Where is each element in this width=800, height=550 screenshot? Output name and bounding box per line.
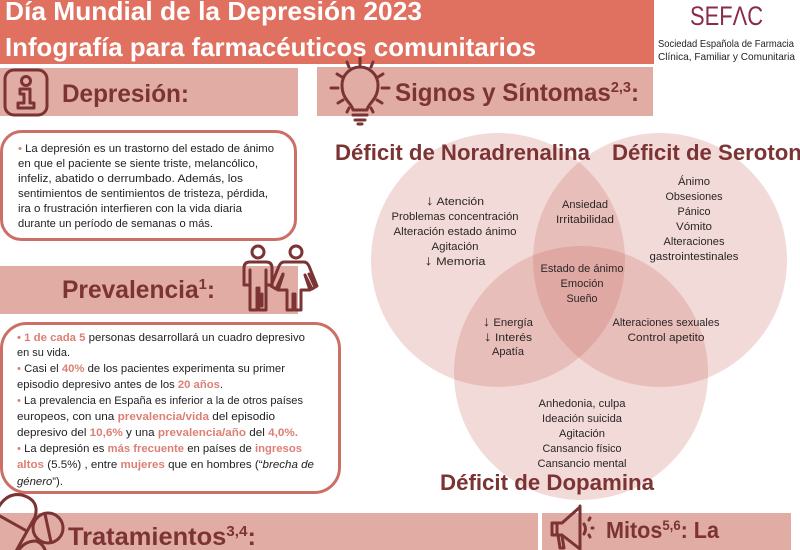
- heading: Prevalencia: Prevalencia: [62, 276, 201, 304]
- list: serotonin and dopamine overlap: Control apetito: [628, 332, 704, 344]
- heading: Prevalencia: 1: [199, 276, 207, 293]
- list: serotonin symptoms: Pánico: [678, 206, 710, 218]
- heading: Depresión: Depresión:: [62, 80, 189, 108]
- panel: prevalence facts: [2, 324, 340, 492]
- panel: depression definition: ira o frustración interfieren con la vida diaria: [18, 203, 243, 215]
- list: noradrenaline symptoms: Problemas concentración: [392, 211, 518, 223]
- list: center overlap: Sueño: [566, 293, 598, 305]
- heading: Mitos: : La: [681, 517, 719, 543]
- list: serotonin symptoms: Vómito: [676, 221, 712, 233]
- panel: prevalence facts: género”).: [17, 476, 63, 488]
- logo: SEFAC: Clínica, Familiar y Comunitaria: [658, 51, 795, 63]
- panel: prevalence facts: • 1 de cada 5 personas desarrollará un cuadro depresivo: [17, 332, 305, 344]
- list: noradrenaline symptoms: Agitación: [432, 241, 478, 253]
- list: noradrenaline symptoms: ↓ Atención: [426, 192, 484, 208]
- list: noradrenaline symptoms: ↓ Memoria: [424, 252, 487, 268]
- list: dopamine symptoms: [538, 398, 626, 470]
- list: dopamine symptoms: Cansancio físico: [542, 443, 622, 455]
- icon: information: [5, 70, 47, 115]
- icon: man and woman: [244, 246, 317, 310]
- panel: prevalence facts: • La depresión es más frecuente en países de ingresos: [17, 443, 302, 455]
- list: noradrenaline and serotonin overlap: Irritabilidad: [556, 214, 614, 226]
- list: serotonin symptoms: [650, 175, 739, 263]
- heading: Prevalencia: :: [207, 276, 215, 304]
- circle: dopamine: [454, 246, 708, 500]
- circle: serotonin: [533, 133, 787, 387]
- panel: prevalence facts: altos (5.5%) , entre mujeres que en hombres (“ brecha de: [17, 459, 314, 471]
- panel: prevalence facts: en su vida.: [17, 347, 70, 359]
- list: serotonin symptoms: Obsesiones: [666, 191, 723, 203]
- panel: prevalence facts: • La prevalencia en España es inferior a la de otros países: [17, 395, 303, 407]
- list: serotonin symptoms: Ánimo: [678, 175, 710, 188]
- panel: depression definition: durante un período de semanas o más.: [18, 218, 213, 230]
- list: noradrenaline symptoms: Alteración estado ánimo: [394, 226, 516, 238]
- logo: SEFAC: SEFΛC: [690, 1, 763, 31]
- list: noradrenaline and dopamine overlap: ↓ Energía: [483, 313, 534, 329]
- heading: Signos y Síntomas: 2,3: [611, 79, 631, 96]
- panel: prevalence facts: depresivo del 10,6% y una prevalencia/año del 4,0%.: [17, 427, 298, 439]
- heading: Depresión: [0, 68, 298, 116]
- panel: depression definition: sentimientos de sentimientos de tristeza, pérdida,: [18, 188, 268, 200]
- title banner: Infografía para farmacéuticos comunitarios: [5, 32, 536, 62]
- icon: lightbulb: [331, 58, 389, 124]
- list: center overlap: [540, 263, 624, 305]
- list: dopamine symptoms: Agitación: [559, 428, 605, 440]
- list: noradrenaline symptoms: [392, 192, 518, 268]
- heading: Mitos: Mitos: [606, 517, 666, 543]
- list: serotonin symptoms: gastrointestinales: [650, 251, 739, 263]
- heading: Signos y Síntomas: :: [631, 79, 639, 107]
- list: noradrenaline and dopamine overlap: Apatía: [492, 346, 525, 358]
- icon: pills: [0, 495, 63, 550]
- label: Déficit de Noradrenalina: Déficit de Noradrenalina: [335, 140, 591, 165]
- list: serotonin and dopamine overlap: [612, 317, 720, 344]
- panel: depression definition: infeliz, abatido o derrumbado. Además, los: [18, 173, 244, 185]
- heading: Mitos: [542, 513, 791, 550]
- list: noradrenaline and dopamine overlap: [483, 313, 534, 358]
- heading: Tratamientos: [0, 513, 538, 550]
- title banner: [0, 0, 654, 64]
- heading: Signos y Síntomas: [317, 67, 653, 116]
- panel: prevalence facts: episodio depresivo antes de los 20 años.: [17, 379, 223, 391]
- list: dopamine symptoms: Ideación suicida: [542, 413, 623, 425]
- list: center overlap: Emoción: [560, 278, 604, 290]
- icon: megaphone: [552, 506, 593, 550]
- heading: Prevalencia: [0, 266, 298, 314]
- logo: SEFAC: [658, 1, 795, 63]
- list: serotonin symptoms: Alteraciones: [664, 236, 725, 248]
- label: Déficit de Dopamina: Déficit de Dopamina: [440, 470, 655, 495]
- list: center overlap: Estado de ánimo: [540, 263, 624, 275]
- panel: prevalence facts: • Casi el 40% de los pacientes experimenta su primer: [17, 363, 285, 375]
- list: noradrenaline and serotonin overlap: [556, 199, 614, 226]
- list: noradrenaline and serotonin overlap: Ansiedad: [562, 199, 608, 211]
- chart: Venn diagram of neurotransmitter deficits: [335, 133, 800, 500]
- circle: noradrenaline: [371, 133, 625, 387]
- list: serotonin and dopamine overlap: Alteraciones sexuales: [612, 317, 720, 329]
- heading: Tratamientos: 3,4: [226, 523, 248, 540]
- list: dopamine symptoms: Anhedonia, culpa: [538, 398, 626, 410]
- panel: depression definition: • La depresión es un trastorno del estado de ánimo: [18, 143, 274, 155]
- list: noradrenaline and dopamine overlap: ↓ Interés: [484, 328, 533, 344]
- panel: depression definition: en que el paciente se siente triste, melancólico,: [18, 158, 258, 170]
- panel: depression definition: [2, 132, 296, 240]
- heading: Signos y Síntomas: Signos y Síntomas: [395, 79, 619, 107]
- heading: Mitos: 5,6: [662, 517, 681, 533]
- panel: prevalence facts: europeos, con una prevalencia/vida del episodio: [17, 411, 275, 423]
- list: dopamine symptoms: Cansancio mental: [538, 458, 626, 470]
